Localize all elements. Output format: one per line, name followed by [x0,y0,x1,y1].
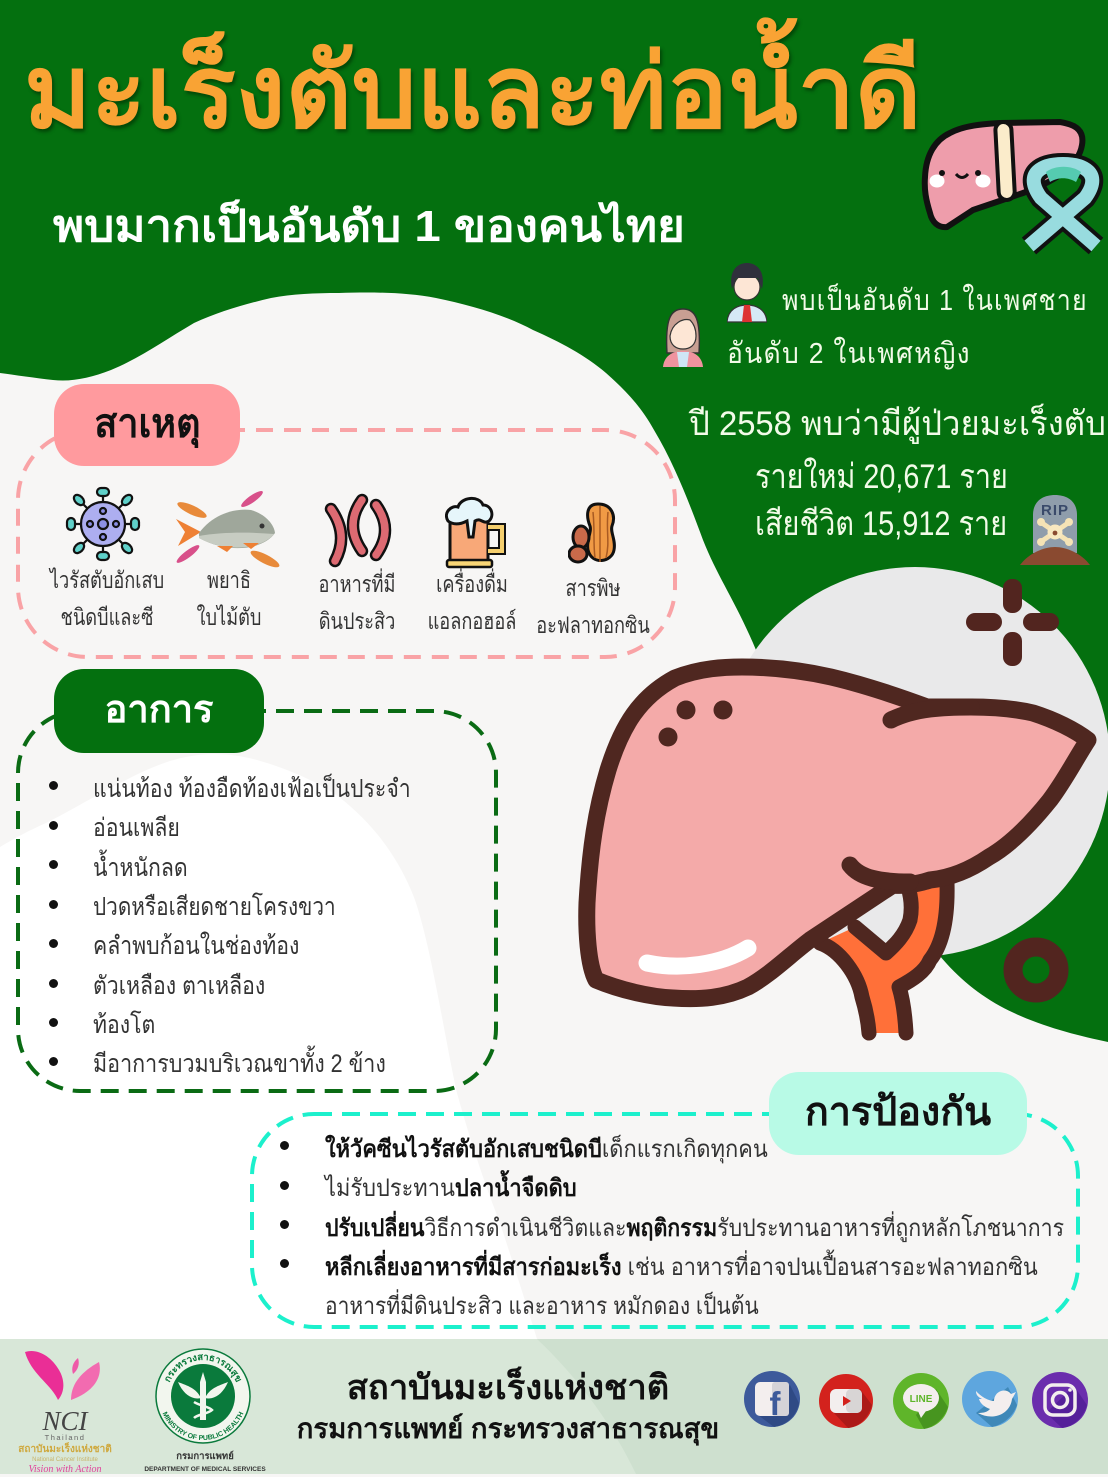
icon: woman [663,308,703,367]
social icons: f [770,1385,782,1422]
decoration: ring [1004,938,1068,1002]
heading: symptoms: อาการ [105,689,213,731]
statistics text: รายใหม่ 20,671 ราย [755,458,1008,496]
logo: National Cancer Institute: Thailand [45,1433,85,1442]
logo: National Cancer Institute: National Cancer Institute [32,1457,99,1463]
logo: National Cancer Institute: สถาบันมะเร็งแห่งชาติ [18,1441,112,1455]
footer [18,1348,1088,1474]
panel: symptoms [16,669,498,1093]
symptoms list: ท้องโต [93,1011,155,1039]
cause labels: อะฟลาทอกซิน [536,612,650,638]
organisation name: สถาบันมะเร็งแห่งชาติ [347,1369,669,1407]
prevention list: ปรับเปลี่ยนวิธีการดำเนินชีวิตและพฤติกรรมรับประทานอาหารที่ถูกหลักโภชนาการ [325,1215,1064,1242]
icon: fish [176,491,280,568]
logo: Ministry of Public Health: กรมการแพทย์ [176,1450,234,1462]
heading: prevention: การป้องกัน [805,1090,991,1134]
icon: tombstone: RIP [1041,502,1069,519]
female rank text: อันดับ 2 ในเพศหญิง [727,338,971,370]
social icons [744,1371,1088,1429]
prevention list [280,1134,1064,1320]
symptoms list: น้ำหนักลด [93,854,188,882]
symptoms list [49,774,411,1078]
prevention list: ให้วัคซีนไวรัสตับอักเสบชนิดบีเด็กแรกเกิดทุกคน [325,1136,768,1163]
symptoms list: อ่อนเพลีย [93,814,180,842]
icon: tombstone [1020,495,1090,565]
cause labels: พยาธิ [207,567,251,593]
statistics text [688,404,1106,543]
cause labels [48,567,650,638]
subtitle: พบมากเป็นอันดับ 1 ของคนไทย [53,202,685,251]
heading: symptoms [54,669,264,753]
heading: causes [54,384,240,466]
title: มะเร็งตับและท่อน้ำดี [24,35,921,149]
symptoms list: ปวดหรือเสียดชายโครงขวา [93,893,336,921]
icon: liver with ribbon [922,119,1104,254]
logo: Ministry of Public Health: กระทรวงสาธารณสุข [165,1354,242,1382]
icon: peanut [568,502,616,564]
logo: Ministry of Public Health: DEPARTMENT OF MEDICAL SERVICES [144,1466,266,1473]
symptoms list: คลำพบก้อนในช่องท้อง [93,932,299,960]
logo: Ministry of Public Health [144,1348,266,1473]
prevention list: หลีกเลี่ยงอาหารที่มีสารก่อมะเร็ง เช่น อาหารที่อาจปนเปื้อนสารอะฟลาทอกซิน [325,1254,1038,1281]
cause labels: อาหารที่มี [318,571,396,597]
cause labels: แอลกอฮอล์ [428,608,516,634]
decoration: sparkle [966,579,1059,666]
logo: Ministry of Public Health: MINISTRY OF PUBLIC HEALTH [162,1412,244,1440]
icon: sausages [324,494,392,568]
icon: man [727,263,767,323]
heading: prevention [769,1072,1027,1155]
cause labels: เครื่องดื่ม [436,571,508,597]
social icons: LINE [910,1394,933,1405]
cause labels: สารพิษ [565,575,621,601]
symptoms list: แน่นท้อง ท้องอืดท้องเฟ้อเป็นประจำ [93,775,411,803]
cause labels: ดินประสิว [319,608,395,634]
symptoms list: มีอาการบวมบริเวณขาทั้ง 2 ข้าง [93,1050,386,1078]
icon: large liver [578,658,1096,1040]
cause labels: ใบไม้ตับ [197,604,261,630]
statistics text: ปี 2558 พบว่ามีผู้ป่วยมะเร็งตับ [689,405,1106,443]
logo: National Cancer Institute [18,1351,112,1474]
logo: National Cancer Institute: NCI [41,1406,90,1436]
cause labels: ชนิดบีและซี [60,604,154,630]
symptoms list: ตัวเหลือง ตาเหลือง [93,972,265,1000]
heading: causes: สาเหตุ [94,402,200,446]
cause labels: ไวรัสตับอักเสบ [50,567,164,593]
panel: prevention [250,1072,1080,1329]
department name: กรมการแพทย์ กระทรวงสาธารณสุข [297,1413,719,1444]
prevention list: อาหารที่มีดินประสิว และอาหาร หมักดอง เป็นต้น [325,1293,759,1320]
icon: beer mug [445,496,506,568]
icon: virus [66,486,140,562]
male rank text: พบเป็นอันดับ 1 ในเพศชาย [782,285,1088,317]
prevention list: ไม่รับประทานปลาน้ำจืดดิบ [325,1175,577,1202]
statistics text: เสียชีวิต 15,912 ราย [755,505,1007,543]
panel: causes [16,384,677,659]
